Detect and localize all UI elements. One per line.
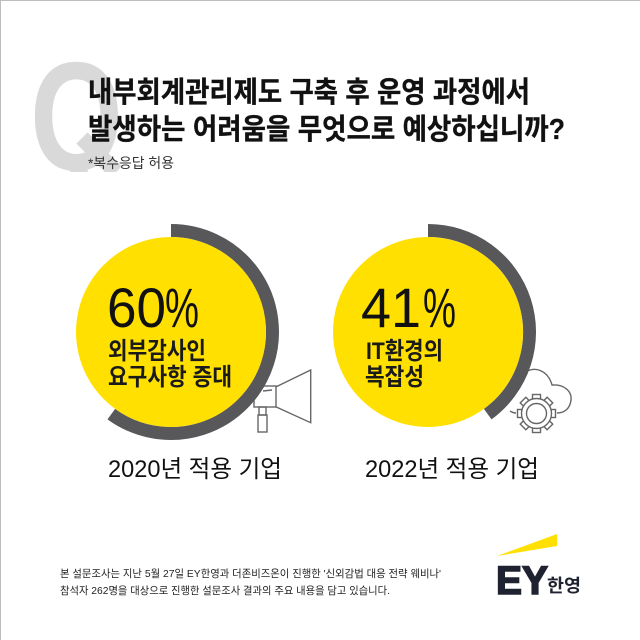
footnote: 본 설문조사는 지난 5월 27일 EY한영과 더존비즈온이 진행한 '신외감법 대응 전략 웨비나' bbox=[60, 567, 441, 580]
title: 내부회계관리제도 구축 후 운영 과정에서 bbox=[88, 76, 530, 109]
value: 41% bbox=[361, 276, 456, 339]
label: IT environment complexity bbox=[365, 338, 443, 391]
decorative letter Q bbox=[35, 62, 122, 172]
label: external auditor requirements: 외부감사인 bbox=[108, 338, 206, 365]
icon: megaphone bbox=[254, 370, 311, 432]
label: IT environment complexity: IT환경의 bbox=[366, 338, 443, 365]
title: 발생하는 어려움을 무엇으로 예상하십니까? bbox=[88, 113, 565, 146]
note: multiple responses: *복수응답 허용 bbox=[88, 155, 174, 171]
label: external auditor requirements: 요구사항 증대 bbox=[108, 364, 232, 391]
caption: 2020 adopters: 2020년 적용 기업 bbox=[108, 456, 282, 483]
chart: 60% donut bbox=[76, 230, 272, 434]
label: external auditor requirements bbox=[108, 338, 232, 391]
value: 60%: 60 bbox=[107, 276, 166, 339]
logo: EY Hanyoung: EY bbox=[496, 559, 548, 603]
icon: cloud with gear bbox=[510, 369, 571, 432]
logo: EY Hanyoung bbox=[496, 534, 581, 603]
value: 60%: % bbox=[165, 276, 199, 339]
title bbox=[88, 76, 565, 146]
chart: 41% donut bbox=[333, 230, 530, 427]
value: 41%: % bbox=[423, 276, 456, 339]
footnote: 참석자 262명을 대상으로 진행한 설문조사 결과의 주요 내용을 담고 있습니다. bbox=[60, 585, 390, 597]
caption: 2022 adopters: 2022년 적용 기업 bbox=[365, 456, 539, 483]
label: IT environment complexity: 복잡성 bbox=[365, 364, 424, 391]
value: 60% bbox=[107, 276, 199, 339]
value: 41%: 41 bbox=[361, 276, 421, 339]
decorative letter Q: Q bbox=[30, 30, 123, 203]
footnote bbox=[60, 567, 441, 597]
logo: EY Hanyoung: 한영 bbox=[547, 576, 581, 596]
